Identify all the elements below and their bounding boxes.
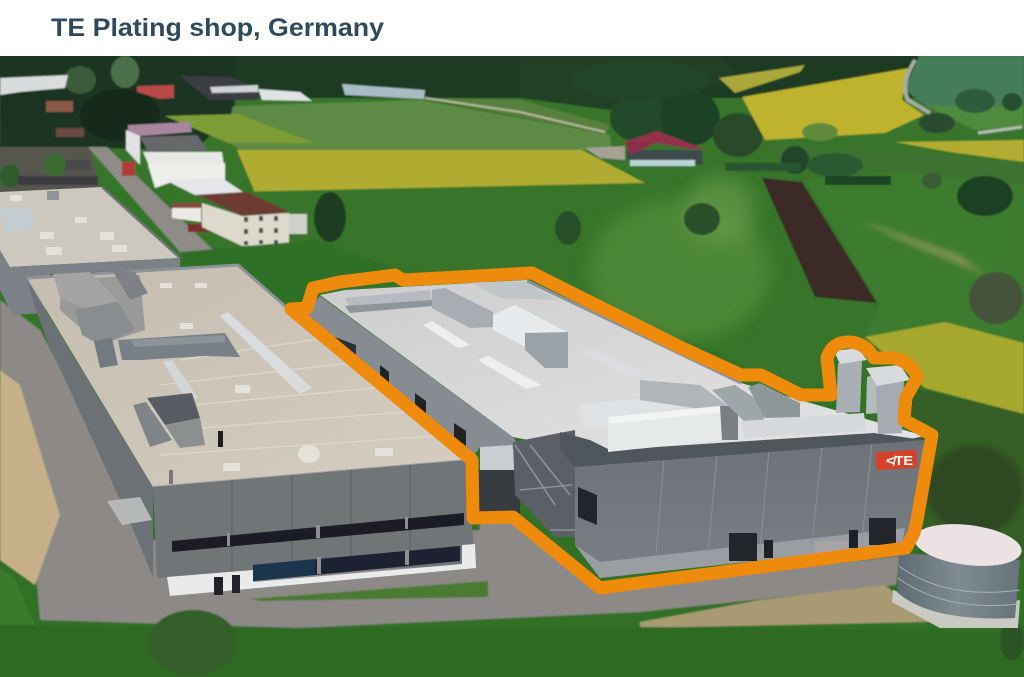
window strip lower	[253, 546, 460, 581]
outlined building: TE plating shop	[296, 280, 925, 578]
roof	[27, 265, 467, 487]
left wall	[27, 280, 153, 577]
link section between buildings	[480, 445, 520, 470]
office buildings	[122, 122, 307, 246]
side wall	[300, 296, 520, 458]
front wall	[575, 440, 924, 578]
orange outline highlighting plating shop	[291, 273, 932, 588]
access road by offices	[88, 147, 213, 252]
ground: road	[0, 300, 900, 628]
chiller units	[133, 393, 205, 448]
forest treeline	[0, 56, 920, 150]
brown ploughed strip	[762, 178, 877, 303]
top band of plant deck	[560, 432, 924, 467]
ground: sand	[0, 370, 60, 585]
top middle field	[225, 100, 612, 150]
rooftop duct	[118, 333, 240, 360]
roof details	[160, 283, 393, 471]
roof	[320, 280, 925, 452]
farm buildings far left	[0, 75, 425, 137]
roof ducts	[345, 290, 432, 309]
long duct	[741, 413, 866, 438]
curved road	[905, 60, 930, 113]
side ledge	[296, 312, 345, 338]
side window	[578, 487, 597, 525]
rooftop HVAC	[53, 272, 118, 310]
main green field	[180, 175, 930, 390]
awning	[107, 497, 152, 525]
white air handler	[493, 305, 567, 348]
lower grass	[0, 625, 1024, 677]
header band	[0, 0, 1024, 56]
middle building (unoutlined)	[27, 265, 476, 596]
right green meadow	[805, 160, 1024, 343]
TE logo sign	[875, 450, 918, 470]
front louvres and doors	[729, 533, 757, 561]
lower right yellow field	[865, 322, 1024, 414]
rooftop air units	[580, 394, 685, 428]
steel staircase	[513, 430, 578, 537]
right meadow lower	[905, 385, 1024, 560]
rear building	[0, 187, 180, 315]
doors	[214, 577, 223, 595]
water tank	[892, 519, 1024, 628]
title: TE Plating shop, Germany	[51, 14, 384, 42]
plinth	[575, 528, 905, 578]
short skylight	[163, 360, 198, 402]
window strip upper	[172, 513, 464, 552]
aerial photo: forest base strip	[0, 56, 915, 98]
tree clump behind barn	[570, 60, 763, 157]
exhaust stacks	[834, 348, 910, 434]
TE logo sign: ≮TE	[886, 453, 913, 468]
top right fields	[905, 56, 1024, 106]
long skylight	[220, 312, 312, 394]
green between buildings	[182, 240, 400, 305]
isolated trees	[314, 89, 1023, 324]
white plinth	[167, 544, 476, 596]
person	[218, 431, 223, 447]
grass strip along building front	[250, 581, 488, 601]
front wall	[153, 460, 475, 578]
cooling units	[712, 385, 765, 422]
barn	[585, 131, 704, 166]
dirt verge	[640, 585, 930, 628]
yellow field middle	[237, 150, 645, 193]
parking lot	[0, 147, 100, 195]
bush foreground	[148, 610, 238, 676]
skylights	[423, 321, 470, 348]
roof seams	[140, 335, 450, 455]
path	[425, 98, 605, 132]
